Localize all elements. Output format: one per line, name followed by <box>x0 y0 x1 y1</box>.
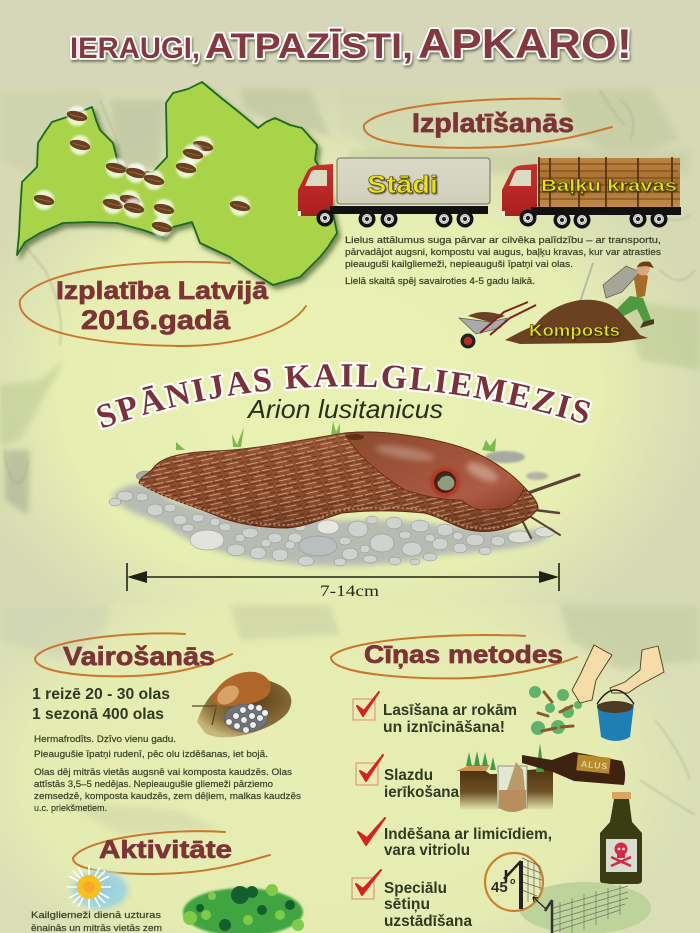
method: hand picking <box>353 692 517 736</box>
method: poison <box>358 818 552 859</box>
species title: SPĀNIJAS KAILGLIEMEZIS <box>94 362 592 430</box>
size arrow <box>127 563 559 600</box>
slug body <box>139 432 538 531</box>
panel: reproduction: Hermafrodīts. Dzīvo vienu gadu. <box>34 734 176 745</box>
method: hand picking: Lasīšana ar rokām <box>383 702 517 719</box>
method: traps <box>356 755 459 801</box>
bucket <box>597 690 634 741</box>
brush ellipse <box>35 633 232 676</box>
gravel <box>109 471 555 566</box>
title: ATPAZĪSTI, <box>205 27 413 66</box>
panel: activity: Aktivitāte <box>99 836 232 864</box>
method: fence: uzstādīšana <box>384 913 472 930</box>
cab <box>502 164 537 216</box>
panel: activity: Kailgliemeži dienā uzturas <box>31 910 161 921</box>
panel: activity <box>31 831 304 933</box>
species title: Arion lusitanicus <box>246 394 443 424</box>
heading: distribution in Latvia: Izplatība Latvijā <box>56 277 269 305</box>
method: poison: Indēšana ar limicīdiem, <box>384 826 552 843</box>
title <box>70 20 632 67</box>
method: poison: vara vitriolu <box>384 842 470 859</box>
icon: skull <box>611 842 631 866</box>
icon: slug with eggs <box>192 672 291 737</box>
heading: spread: Izplatīšanās <box>412 108 574 138</box>
truck: seedlings <box>298 158 490 228</box>
cargo box <box>337 158 490 204</box>
panel: reproduction <box>32 633 301 814</box>
logs <box>538 158 680 207</box>
arms <box>572 645 612 703</box>
panel: control methods <box>331 635 664 933</box>
panel: reproduction: Pieaugušie īpatņi rudenī, pēc olu izdēšanas, iet bojā. <box>34 749 268 760</box>
map outline <box>17 82 337 285</box>
method: fence <box>352 870 472 930</box>
truck: seedlings: Stādi <box>367 171 438 199</box>
panel: reproduction: u.c. priekšmetiem. <box>34 803 107 814</box>
detail circle 45 degrees: o <box>510 876 516 886</box>
brush ellipse <box>331 635 577 678</box>
size arrow: 7-14cm <box>320 583 380 600</box>
brush ellipse <box>73 831 270 874</box>
panel: reproduction: Olas dēj mitrās vietās augsnē vai komposta kaudzēs. Olas <box>34 767 292 778</box>
pointer arrow <box>533 897 546 909</box>
truck: log load: Baļķu kravas <box>541 176 677 195</box>
illustration: slug fence <box>485 853 651 933</box>
cab <box>298 164 333 216</box>
brush ellipse <box>364 99 612 148</box>
illustration: poison bottle <box>600 792 642 884</box>
text: how the species spreads: pārvadājot augsni, kompostu vai augus, baļķu kravas, kur var atrasties <box>345 247 661 258</box>
compost pile <box>505 300 648 344</box>
title: IERAUGI, <box>70 32 200 65</box>
text: how the species spreads <box>345 235 661 287</box>
panel: reproduction: Vairošanās <box>63 641 215 671</box>
panel: control methods: Cīņas metodes <box>364 641 563 669</box>
illustration: beer trap <box>456 743 625 812</box>
heading: distribution in Latvia <box>20 262 306 346</box>
illustration: hands and bucket <box>529 645 664 741</box>
panel: reproduction: zemsedzē, komposta kaudzēs, zem dēļiem, malkas kaudzēs <box>34 791 301 802</box>
icon: sun <box>65 865 135 914</box>
detail circle 45 degrees: 45 <box>491 879 508 896</box>
text: how the species spreads: pieauguši kailgliemeži, nepieauguši īpatņi vai olas. <box>345 259 573 270</box>
truck: log load <box>502 157 681 228</box>
illustration: compost, wheelbarrow and man: Komposts <box>529 322 620 340</box>
slug markers <box>33 106 251 237</box>
beer bottle: ALUS <box>580 759 608 772</box>
heading: distribution in Latvia: 2016.gadā <box>81 305 231 335</box>
icon: tree <box>183 884 304 933</box>
grass tufts <box>176 421 496 452</box>
panel: reproduction: 1 reizē 20 - 30 olas <box>32 686 170 703</box>
detail circle 45 degrees <box>485 853 543 911</box>
method: traps: Slazdu <box>384 767 433 784</box>
illustration: slug on gravel <box>109 421 579 566</box>
tentacles <box>522 475 579 538</box>
heading: spread <box>364 99 612 148</box>
brush ellipse <box>20 262 306 346</box>
plant with slugs <box>529 686 582 735</box>
panel: reproduction: 1 sezonā 400 olas <box>32 706 164 723</box>
method: hand picking: un iznīcināšana! <box>383 719 505 736</box>
panel: reproduction: attīstās 3,5–5 nedējas. Nepieaugušie gliemeži pārziemo <box>34 779 273 790</box>
method: traps: ierīkošana <box>384 784 459 801</box>
illustration: compost, wheelbarrow and man <box>459 262 654 348</box>
shovel <box>574 263 593 315</box>
title: APKARO! <box>418 20 632 67</box>
breathing pore <box>430 467 460 497</box>
mantle <box>345 432 524 510</box>
man with sack <box>603 262 654 328</box>
wheelbarrow <box>459 302 536 348</box>
method: fence: Speciālu <box>384 880 447 897</box>
map of Latvia with slug sightings <box>17 82 337 285</box>
glass <box>498 762 527 812</box>
text: how the species spreads: Lielā skaitā spēj savairoties 4-5 gadu laikā. <box>345 276 535 287</box>
method: fence: sētiņu <box>384 896 430 913</box>
foot fringe <box>141 484 510 528</box>
text: how the species spreads: Lielus attālumus suga pārvar ar cilvēka palīdzību – ar transportu, <box>345 235 661 246</box>
beer bottle <box>522 752 625 785</box>
